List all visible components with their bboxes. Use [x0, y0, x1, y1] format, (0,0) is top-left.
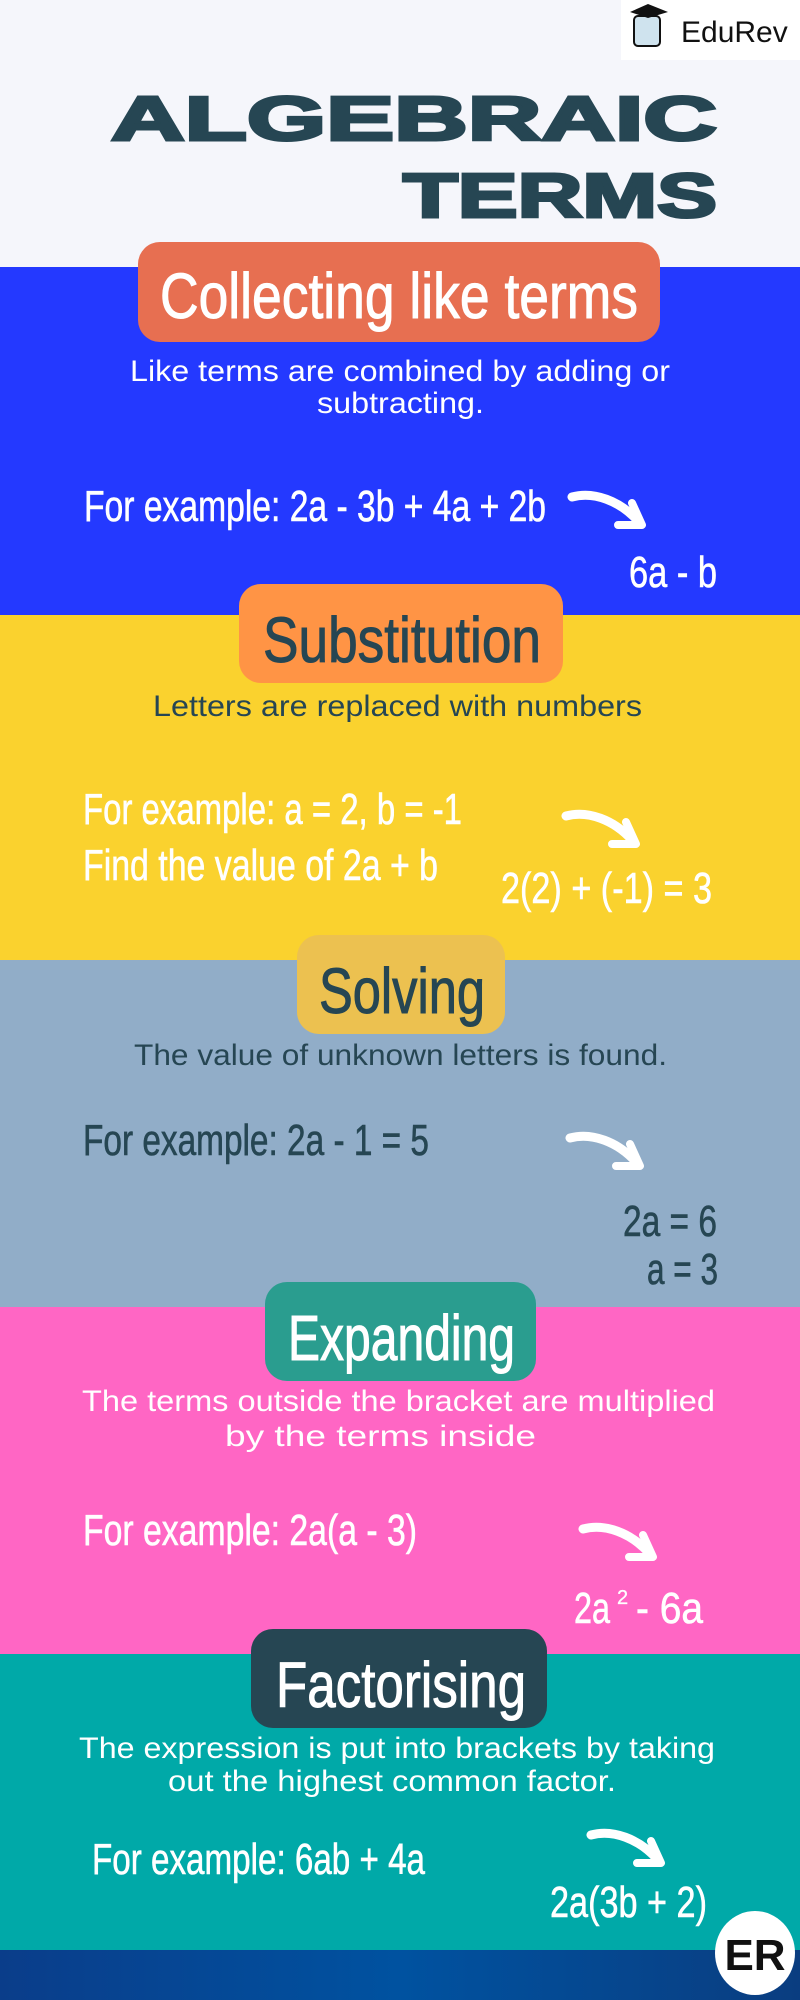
arrow: [572, 495, 642, 525]
answer: 2a(3b + 2): [550, 1878, 707, 1927]
logo: EduRev: EduRev: [681, 16, 788, 49]
heading pill: Collecting like terms: [160, 260, 638, 332]
panel: solving: [0, 935, 800, 1307]
answer: 2a = 6: [623, 1197, 717, 1246]
description: out the highest common factor.: [168, 1765, 616, 1798]
description: Letters are replaced with numbers: [153, 690, 642, 723]
description: Like terms are combined by adding or: [130, 355, 670, 388]
title: TERMS: [403, 162, 717, 231]
example: For example: 2a - 1 = 5: [83, 1116, 429, 1165]
logo: EduRev: [621, 0, 800, 60]
title: ALGEBRAIC: [111, 85, 717, 154]
answer: 2: [617, 1587, 628, 1609]
arrow: [570, 1136, 640, 1166]
answer: 2a: [574, 1584, 610, 1633]
heading pill: Factorising: [276, 1649, 526, 1721]
example: For example: 2a - 3b + 4a + 2b: [84, 482, 546, 531]
answer: [574, 1584, 703, 1633]
description: [82, 1385, 715, 1453]
answer: 6a - b: [629, 548, 717, 597]
description: The expression is put into brackets by taking: [79, 1732, 715, 1765]
arrow: [566, 814, 636, 844]
heading pill: [297, 935, 505, 1034]
arrow: [583, 1527, 653, 1557]
answer: a = 3: [647, 1245, 718, 1294]
example: For example: 6ab + 4a: [92, 1835, 425, 1884]
arrow: [591, 1833, 661, 1863]
description: [79, 1732, 715, 1798]
description: [130, 355, 670, 420]
example: For example: a = 2, b = -1: [83, 785, 462, 834]
description: The terms outside the bracket are multiplied: [82, 1385, 715, 1418]
heading pill: Expanding: [288, 1302, 515, 1374]
example: Find the value of 2a + b: [83, 841, 438, 890]
panel: factorising: [0, 1629, 800, 1950]
description: by the terms inside: [225, 1420, 536, 1453]
heading pill: [239, 584, 563, 683]
heading pill: [138, 242, 660, 342]
heading pill: [265, 1282, 536, 1381]
heading pill: Substitution: [263, 604, 541, 676]
title: [111, 85, 717, 231]
icon: ER badge: ER: [724, 1931, 786, 1980]
panel: substitution: [0, 584, 800, 960]
panel: collecting like terms: [0, 242, 800, 615]
panel: expanding: [0, 1282, 800, 1654]
answer: - 6a: [636, 1584, 703, 1633]
answer: 2(2) + (-1) = 3: [501, 864, 712, 913]
example: [83, 785, 462, 890]
description: The value of unknown letters is found.: [134, 1039, 667, 1072]
heading pill: [251, 1629, 547, 1728]
icon: ER badge: [715, 1911, 795, 1995]
example: For example: 2a(a - 3): [83, 1506, 417, 1555]
description: subtracting.: [317, 387, 484, 420]
heading pill: Solving: [319, 955, 485, 1027]
answer: [623, 1197, 718, 1294]
